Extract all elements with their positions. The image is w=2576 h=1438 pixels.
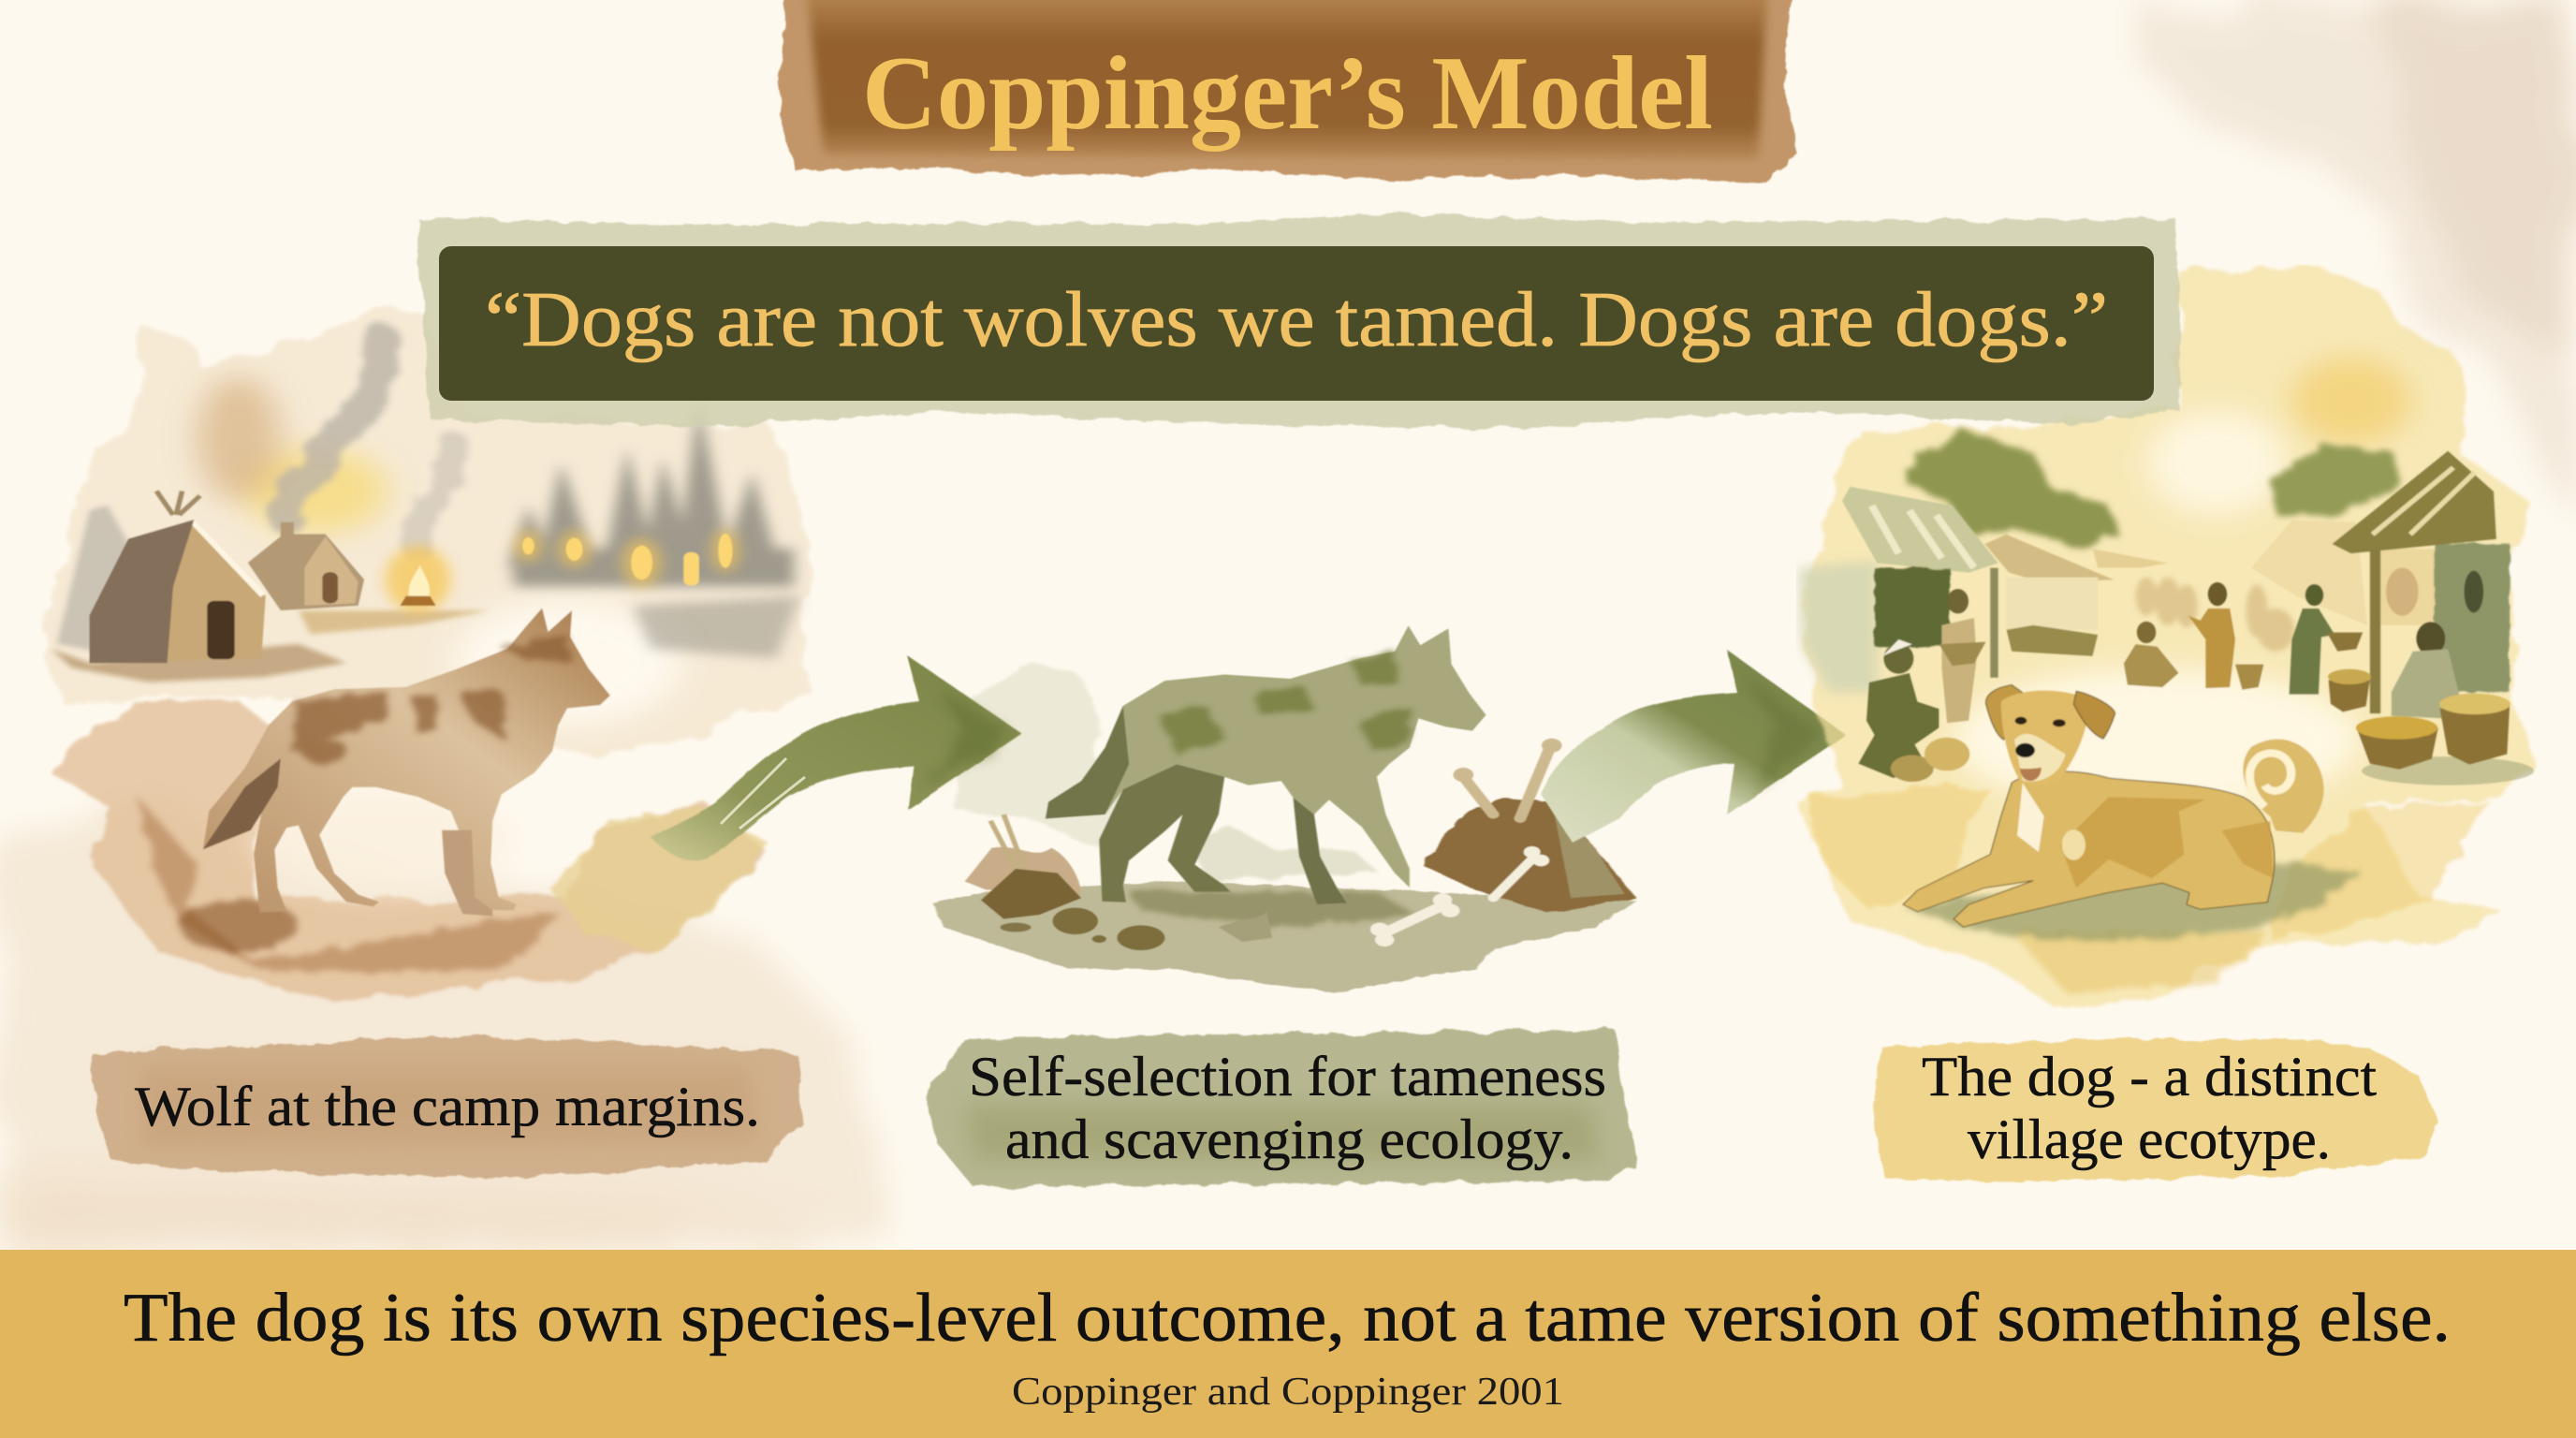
ground dark stains — [138, 797, 562, 974]
wolf — [203, 608, 610, 917]
camp wash — [45, 305, 815, 758]
village lights — [514, 529, 739, 588]
left stall — [1799, 487, 1998, 692]
label text — [969, 1046, 1606, 1170]
yellow wash near arrow — [549, 806, 770, 949]
wolf two — [1046, 625, 1486, 904]
quote box — [439, 246, 2154, 401]
sun blot — [2291, 358, 2410, 444]
label: dog — [1872, 1039, 2437, 1181]
right stalls — [2251, 451, 2510, 713]
tail — [2243, 740, 2324, 833]
ground wash — [932, 881, 1636, 992]
person seated right — [2392, 622, 2460, 718]
dog shadow — [1904, 861, 2362, 940]
title banner — [779, 0, 1794, 183]
label text: Wolf at the camp margins. — [135, 1076, 760, 1137]
teepees — [57, 506, 131, 653]
person crouching — [2124, 622, 2178, 687]
label text: and scavenging ecology. — [1005, 1108, 1573, 1170]
label text: The dog - a distinct — [1922, 1046, 2377, 1108]
label: self-selection — [925, 1030, 1638, 1187]
body — [1903, 771, 2275, 927]
forest — [507, 401, 800, 658]
quote banner — [417, 213, 2181, 429]
scene: village dog — [1799, 267, 2534, 1007]
camp ground — [51, 644, 346, 682]
middle huts — [1984, 535, 2168, 656]
quote text: “Dogs are not wolves we tamed. Dogs are dogs.” — [485, 276, 2108, 363]
campfire — [385, 546, 451, 613]
yellow wash — [1802, 267, 2534, 1007]
person seated left — [1858, 639, 1969, 782]
scene: wolf at camp margins — [45, 305, 815, 1002]
label: wolf — [92, 1035, 803, 1178]
head — [2001, 691, 2088, 785]
baskets — [2235, 665, 2534, 785]
lower yellow stains — [1812, 783, 1984, 907]
arrow one — [651, 655, 1021, 861]
ground wash — [57, 701, 770, 1002]
conclusion text: The dog is its own species-level outcome, not a tame version of something else. — [124, 1280, 2451, 1357]
dirt mound left — [965, 814, 1272, 950]
small hut — [248, 522, 364, 610]
scene: scavenging wolf — [932, 625, 1636, 992]
bottom band — [0, 1250, 2576, 1438]
label text — [1922, 1046, 2377, 1170]
dog — [1903, 685, 2324, 927]
label text: village ecotype. — [1968, 1108, 2331, 1170]
label text: Self-selection for tameness — [969, 1046, 1606, 1108]
citation: Coppinger and Coppinger 2001 — [1012, 1371, 1564, 1414]
title text: Coppinger’s Model — [862, 36, 1713, 152]
dirt mound right — [1422, 739, 1636, 913]
trees — [1904, 430, 2119, 549]
smoke plumes — [286, 338, 454, 549]
large hut — [90, 491, 266, 663]
arrow two — [1541, 650, 1846, 843]
person with basket — [2289, 584, 2363, 695]
bones — [1370, 846, 1549, 946]
person standing — [2188, 582, 2235, 688]
glow around wolf — [454, 601, 681, 725]
pale wash — [956, 664, 1141, 848]
person with bowl — [1939, 589, 1986, 723]
ears — [1985, 685, 2026, 740]
background people — [2135, 578, 2294, 652]
